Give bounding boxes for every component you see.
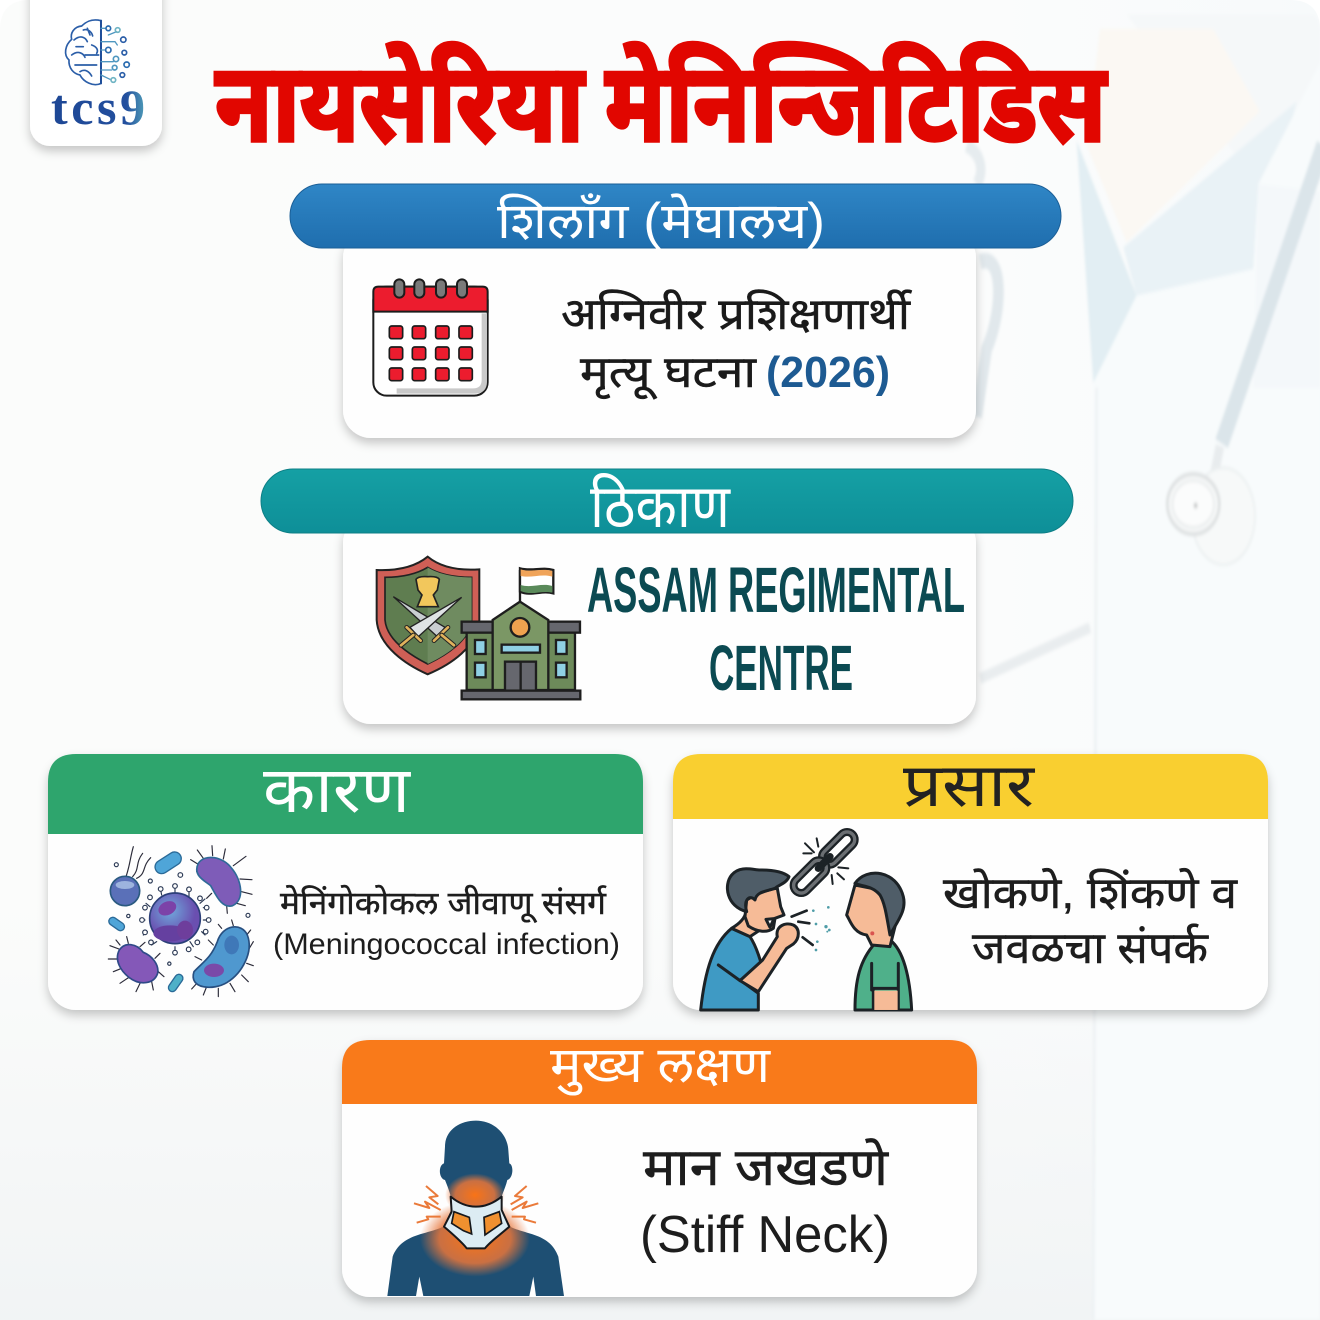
- panel: cause: [48, 754, 643, 1010]
- text: coughing sneezing close contact: [943, 867, 1239, 973]
- heading: Shillong: शिलाँग (मेघालय): [497, 193, 825, 249]
- panel: Shillong date: [290, 184, 1061, 438]
- text: Assam Regimental Centre: CENTRE: [709, 632, 853, 704]
- text: Agniveer trainee death: (2026): [766, 348, 890, 397]
- text: coughing sneezing close contact: खोकणे, शिंकणे व: [943, 867, 1239, 918]
- panel: main symptom: [342, 1037, 977, 1297]
- heading: location: [261, 469, 1073, 540]
- text: stiff neck: [640, 1138, 890, 1264]
- heading: transmission: [673, 752, 1268, 819]
- heading: main symptom: मुख्य लक्षण: [550, 1037, 771, 1096]
- heading: cause: कारण: [263, 754, 412, 826]
- icon: stiff neck: [387, 1121, 564, 1296]
- heading: transmission: प्रसार: [903, 752, 1036, 819]
- icon: brain circuit logo: [66, 20, 129, 85]
- text: Assam Regimental Centre: [587, 554, 965, 704]
- text: coughing sneezing close contact: जवळचा संपर्क: [972, 923, 1209, 973]
- text: Assam Regimental Centre: ASSAM REGIMENTAL: [587, 554, 965, 626]
- icon: bacteria: [107, 846, 253, 997]
- text: stiff neck: (Stiff Neck): [640, 1206, 890, 1264]
- panel: transmission: [673, 752, 1268, 1010]
- text: Agniveer trainee death: मृत्यू घटना: [580, 348, 758, 400]
- text: Agniveer trainee death: अग्निवीर प्रशिक्षणार्थी: [561, 289, 913, 339]
- icon: calendar: [373, 279, 488, 396]
- icon: building with flag: [462, 568, 580, 699]
- heading: Shillong: [290, 184, 1061, 249]
- title: नायसेरिया: [215, 41, 585, 165]
- heading: main symptom: [342, 1037, 977, 1104]
- title: मेनिन्जिटिडिस: [605, 41, 1108, 165]
- icon: army shield: [377, 557, 479, 674]
- heading: cause: [48, 754, 643, 834]
- icon: coughing people and chain: [701, 829, 912, 1010]
- text: meningococcal infection: (Meningococcal infection): [273, 928, 620, 961]
- text: Agniveer trainee death: [561, 289, 913, 400]
- title: [215, 41, 1108, 165]
- heading: location: ठिकाण: [590, 473, 731, 540]
- panel: location: [261, 469, 1073, 724]
- logo wordmark: tcs9: [51, 79, 145, 135]
- text: stiff neck: मान जखडणे: [643, 1138, 889, 1197]
- logo card: [30, 0, 162, 146]
- text: meningococcal infection: मेनिंगोकोकल जीवाणू संसर्ग: [280, 885, 607, 923]
- text: meningococcal infection: [273, 885, 620, 961]
